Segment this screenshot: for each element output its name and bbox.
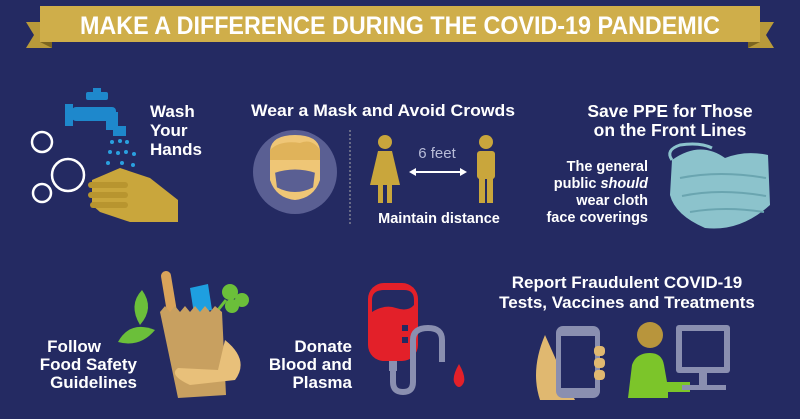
icon: phone in hand — [536, 326, 605, 400]
arrow: 6 feet — [409, 145, 467, 176]
icon: surgical mask — [670, 144, 770, 229]
heading: Guidelines — [50, 373, 137, 392]
icon: faucet — [65, 88, 136, 167]
icon: man — [477, 135, 495, 203]
icon: person at computer — [628, 322, 730, 398]
icon: masked face — [253, 130, 337, 214]
heading: Donate — [294, 337, 352, 356]
heading: Blood and — [269, 355, 352, 374]
heading: Report Fraudulent COVID-19 — [512, 273, 742, 292]
text: general public: The general — [567, 159, 648, 175]
panel: food safety — [40, 276, 249, 398]
heading: Save PPE for Those — [587, 101, 753, 121]
text: general public: wear cloth — [575, 193, 648, 209]
panel: report fraud — [499, 273, 755, 400]
heading: Tests, Vaccines and Treatments — [499, 293, 755, 312]
icon: hands — [88, 168, 178, 222]
title banner — [26, 6, 774, 48]
heading: Follow — [47, 337, 102, 356]
panel: save PPE — [546, 101, 770, 229]
heading: wash your hands: Your — [150, 121, 188, 140]
icon: blood bag — [368, 283, 464, 392]
heading: Plasma — [292, 373, 353, 392]
text: general public: face coverings — [546, 210, 648, 226]
heading: wash your hands: Wash — [150, 102, 195, 121]
text: general public: public should — [554, 176, 648, 192]
arrow: 6 feet: 6 feet — [418, 145, 457, 162]
text: maintain distance: Maintain distance — [378, 211, 500, 227]
panel: mask and crowds — [251, 101, 515, 227]
heading: Wear a Mask and Avoid Crowds — [251, 101, 515, 120]
heading: on the Front Lines — [594, 120, 747, 140]
icon: woman — [370, 135, 400, 203]
panel: donate blood — [269, 283, 464, 392]
icon: bubbles — [32, 132, 84, 202]
title: MAKE A DIFFERENCE DURING THE COVID-19 PANDEMIC — [80, 12, 720, 40]
heading: wash your hands: Hands — [150, 140, 202, 159]
icon: grocery bag — [118, 276, 249, 398]
panel: wash hands — [32, 88, 202, 222]
heading: Food Safety — [40, 355, 138, 374]
